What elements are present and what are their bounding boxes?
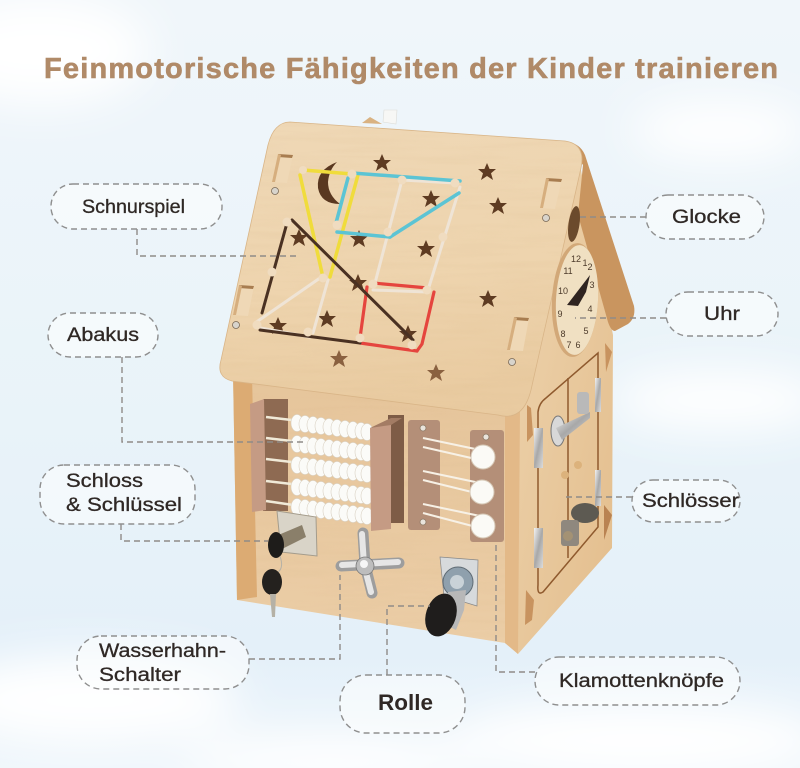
wooden tabs and screws <box>232 154 562 366</box>
label: Wasserhahn-Schalter <box>77 636 249 689</box>
label: Schloss und Schlüssel <box>40 465 195 524</box>
label: Wasserhahn-Schalter: Schalter <box>99 665 182 686</box>
label: Rolle: Rolle <box>378 690 433 715</box>
connector lines <box>121 217 666 675</box>
caster wheel <box>420 557 478 641</box>
front wall <box>233 372 507 643</box>
clock: 1 <box>582 258 588 268</box>
clock: 5 <box>583 326 589 336</box>
clock: 2 <box>587 262 593 272</box>
faucet handle <box>341 533 399 593</box>
clock: 3 <box>589 280 595 290</box>
roof front face <box>220 122 582 416</box>
lacing pegs <box>252 166 460 350</box>
moon <box>318 162 340 204</box>
key lock <box>262 511 317 617</box>
strap on top <box>383 110 397 124</box>
label: Abakus: Abakus <box>67 325 139 346</box>
label: Glocke <box>646 195 764 239</box>
label: Klamottenknöpfe: Klamottenknöpfe <box>559 671 724 692</box>
clock: 9 <box>557 309 563 319</box>
door lock bottom <box>561 503 599 546</box>
label: Rolle <box>340 675 465 733</box>
clock: 6 <box>575 340 581 350</box>
abacus <box>250 399 404 531</box>
stars cut into roof <box>269 154 507 381</box>
label: Schnurspiel <box>51 184 222 229</box>
wooden house toy <box>220 110 634 654</box>
clock: 4 <box>587 304 593 314</box>
label: Klamottenknöpfe <box>535 657 740 705</box>
clock: 11 <box>563 266 573 276</box>
label: Uhr: Uhr <box>704 304 741 325</box>
abacus beads <box>291 414 373 524</box>
clock: 12 <box>571 254 581 264</box>
clock: 7 <box>566 340 572 350</box>
label: Glocke: Glocke <box>672 207 741 228</box>
roof overhang <box>566 142 634 331</box>
clock: 10 <box>558 286 568 296</box>
buttonhole plates with buttons <box>408 420 504 542</box>
side doors <box>538 353 598 593</box>
side wall <box>505 165 613 654</box>
label: Schnurspiel: Schnurspiel <box>82 197 185 218</box>
label: Uhr <box>666 292 778 336</box>
label: Schloss und Schlüssel: & Schlüssel <box>66 495 182 516</box>
label: Wasserhahn-Schalter: Wasserhahn- <box>99 641 226 662</box>
bell hole <box>566 205 582 243</box>
clock: 8 <box>560 329 566 339</box>
label: Abakus <box>48 313 158 357</box>
label: Schloss und Schlüssel: Schloss <box>66 471 143 492</box>
label: Schlösser: Schlösser <box>642 491 740 512</box>
door latch top <box>551 392 590 446</box>
clock <box>549 242 601 358</box>
door hinges and knobs <box>525 343 612 625</box>
lacing strings <box>255 170 460 351</box>
label: Schlösser <box>632 480 740 522</box>
title: Feinmotorische Fähigkeiten der Kinder trainieren <box>44 53 778 85</box>
